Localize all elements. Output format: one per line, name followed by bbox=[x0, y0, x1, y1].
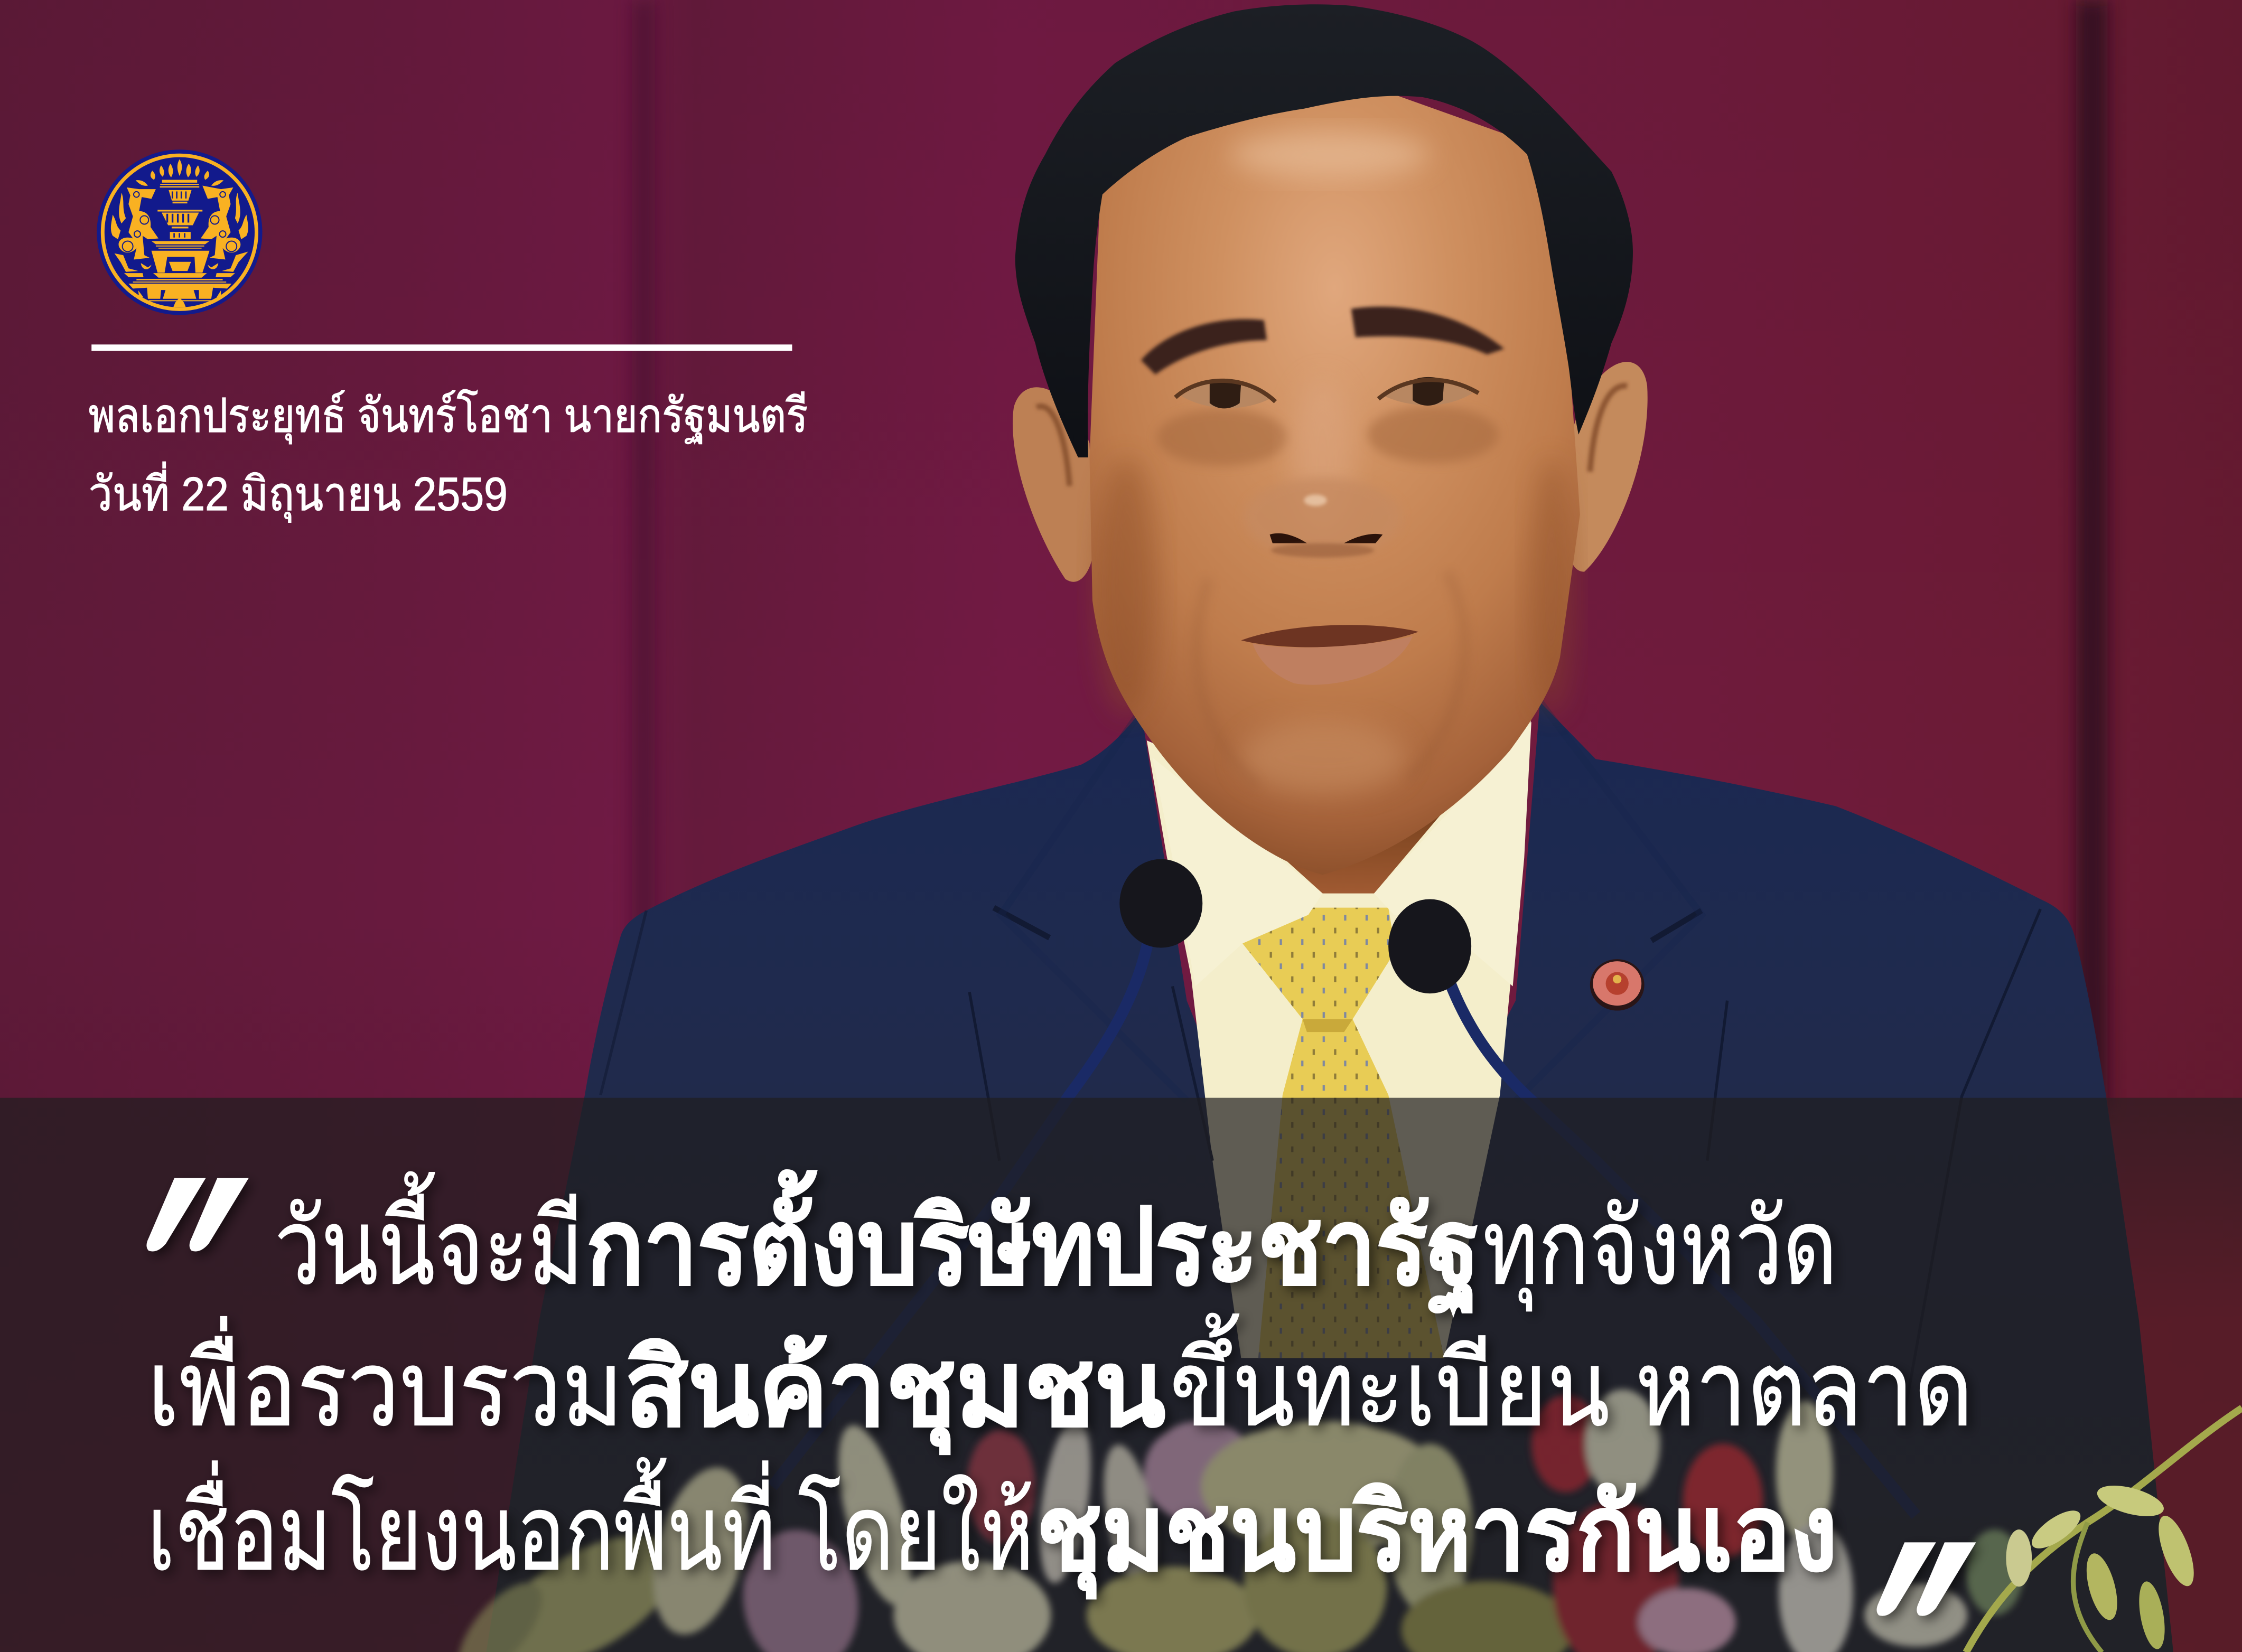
suit jacket bbox=[486, 702, 2173, 1652]
facial shading bbox=[1095, 132, 1574, 795]
mouth bbox=[1241, 625, 1418, 685]
face bbox=[1089, 71, 1580, 875]
hair bbox=[1015, 4, 1633, 457]
orchid branch bbox=[1966, 1408, 2242, 1652]
shirt bbox=[1147, 714, 1531, 1358]
brows bbox=[1141, 306, 1504, 374]
shirt collar bbox=[1153, 722, 1531, 987]
red backdrop right of the suit bbox=[2106, 1098, 2242, 1652]
closing quote mark bbox=[1876, 1542, 1976, 1616]
seal pedestal bbox=[124, 251, 235, 307]
quote line 1: ทุกจังหวัด bbox=[1483, 1189, 1837, 1312]
quote line 1: วันนี้จะมี bbox=[275, 1172, 583, 1307]
lapels and seams bbox=[601, 702, 2040, 1430]
quote line 3: ชุมชนบริหารกันเอง bbox=[1036, 1475, 1837, 1599]
bottom quote band bbox=[0, 1098, 2242, 1652]
quote line 1: การตั้งบริษัทประชารัฐ bbox=[586, 1170, 1480, 1316]
photo: speaker bbox=[486, 4, 2173, 1652]
opening quote mark bbox=[146, 1178, 249, 1251]
necktie bbox=[1243, 908, 1444, 1358]
quote line 2: ขึ้นทะเบียน หาตลาด bbox=[1170, 1313, 1973, 1448]
flower arrangement bbox=[444, 1390, 2023, 1652]
speaker name and date bbox=[89, 389, 808, 522]
quotation bbox=[146, 1170, 1976, 1616]
seal urn bbox=[152, 180, 210, 249]
ears bbox=[1013, 362, 1648, 582]
seal right lion bbox=[201, 185, 248, 272]
quote line 2: สินค้าชุมชน bbox=[625, 1330, 1165, 1454]
quote line 1 bbox=[275, 1170, 1837, 1316]
neck bbox=[1148, 672, 1531, 894]
microphones bbox=[772, 859, 1916, 1515]
government seal logo bbox=[97, 149, 263, 315]
quote line 3 bbox=[147, 1458, 1837, 1599]
seal left lion bbox=[111, 187, 158, 272]
date: วันที่ 22 มิถุนายน 2559 bbox=[89, 462, 508, 522]
divider line bbox=[91, 344, 792, 351]
quote line 2 bbox=[147, 1313, 1973, 1454]
eyes bbox=[1175, 377, 1479, 408]
speaker name: พลเอกประยุทธ์ จันทร์โอชา นายกรัฐมนตรี bbox=[89, 389, 808, 444]
seal flames bbox=[136, 159, 223, 186]
nose bbox=[1244, 477, 1401, 558]
quote line 2: เพื่อรวบรวม bbox=[147, 1316, 623, 1448]
lapel pin bbox=[1590, 959, 1645, 1011]
quote line 3: เชื่อมโยงนอกพื้นที่ โดยให้ bbox=[147, 1458, 1034, 1592]
